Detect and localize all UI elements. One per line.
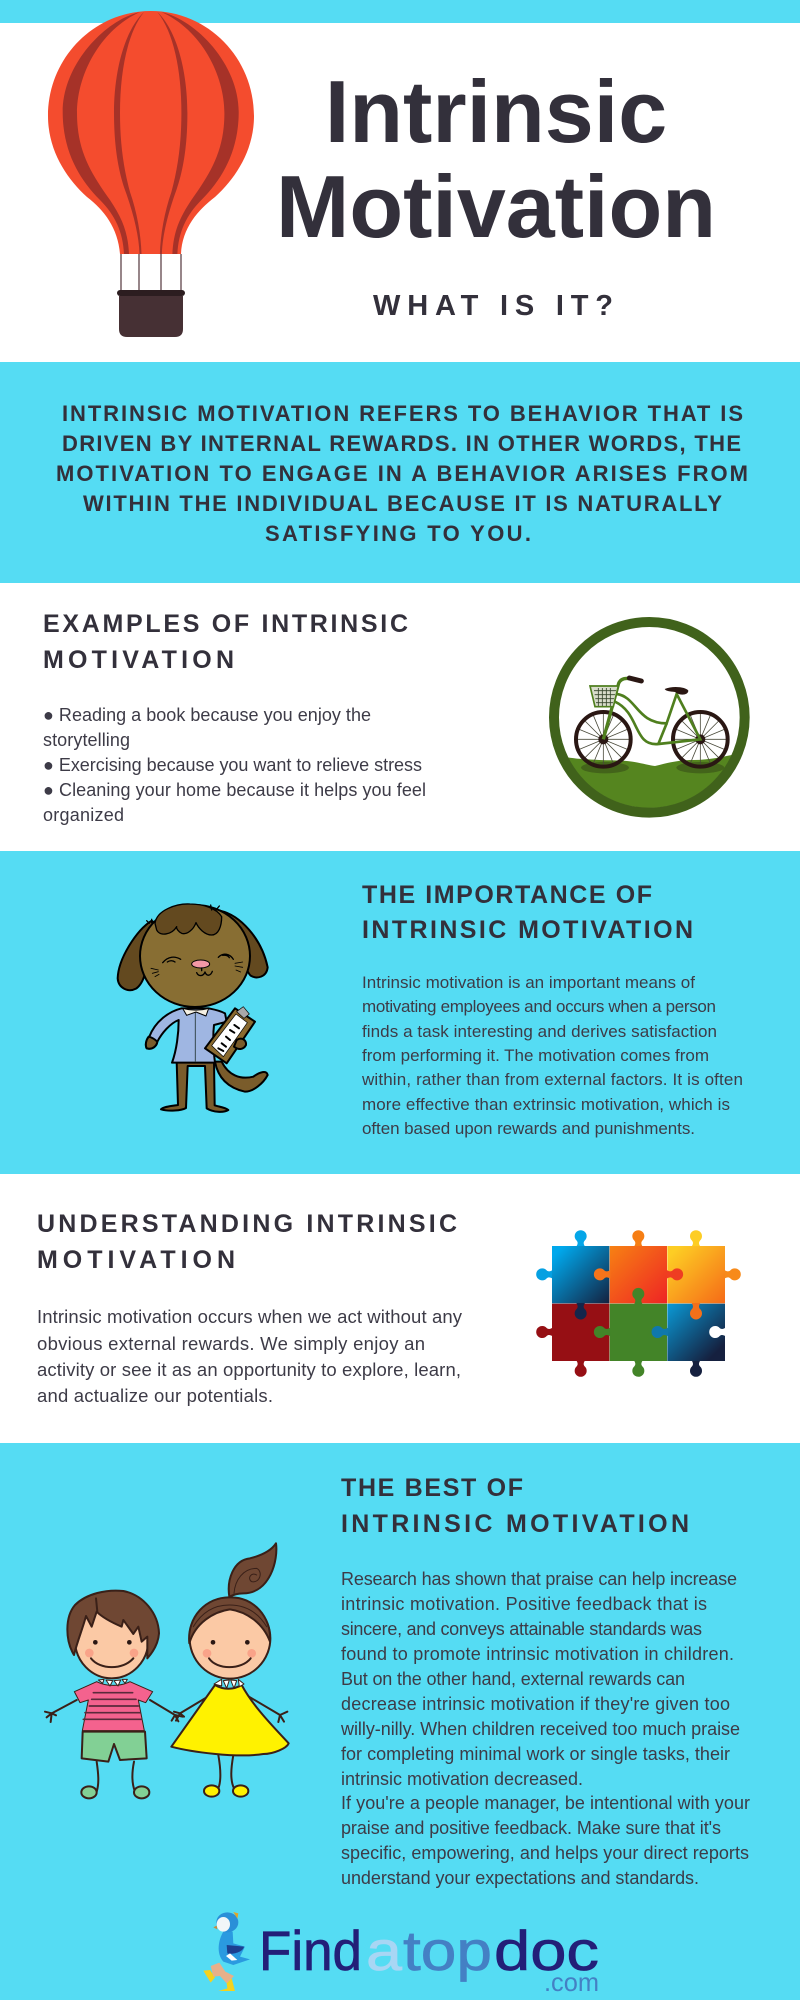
- heading: understanding: MOTIVATION: [37, 1246, 235, 1274]
- understanding paragraph: and actualize our potentials.: [37, 1385, 273, 1406]
- examples list: organized: [43, 805, 124, 825]
- panel: examples: [43, 610, 745, 825]
- understanding paragraph: [37, 1306, 463, 1406]
- heading: best of: [341, 1474, 689, 1538]
- heading: best of: INTRINSIC MOTIVATION: [341, 1510, 689, 1538]
- logo wordmark: .com: [544, 1967, 599, 1997]
- panel: understanding: [37, 1210, 741, 1406]
- best of paragraph: If you're a people manager, be intentional with your: [341, 1793, 750, 1813]
- heading: examples: MOTIVATION: [43, 646, 234, 674]
- best of paragraph: found to promote intrinsic motivation in children.: [341, 1644, 734, 1664]
- examples list: ● Reading a book because you enjoy the: [43, 705, 371, 725]
- importance paragraph: often based upon rewards and punishments.: [362, 1119, 695, 1138]
- logo: Findatopdoc.com: [203, 1912, 599, 1997]
- importance paragraph: [361, 973, 743, 1138]
- icon: puzzle: [536, 1230, 741, 1377]
- best of paragraph: understand your expectations and standards.: [341, 1868, 699, 1888]
- best of paragraph: Research has shown that praise can help increase: [341, 1569, 737, 1589]
- heading: examples: [43, 610, 408, 674]
- panel: the best of: [0, 1443, 800, 2000]
- heading: importance: INTRINSIC MOTIVATION: [362, 916, 693, 944]
- best of paragraph: sincere, and conveys attainable standards was: [341, 1619, 702, 1639]
- importance paragraph: within, rather than from external factors. It is often: [361, 1070, 743, 1089]
- importance paragraph: finds a task interesting and derives satisfaction: [362, 1022, 717, 1041]
- best of paragraph: willy-nilly. When children received too much praise: [340, 1719, 740, 1739]
- heading: understanding: [37, 1210, 457, 1274]
- panel: importance: [0, 851, 800, 1174]
- title: Intrinsic: [325, 62, 667, 161]
- heading: importance: THE IMPORTANCE OF: [362, 881, 652, 909]
- best of paragraph: for completing minimal work or single tasks, their: [341, 1744, 730, 1764]
- icon: dog with clipboard: [118, 904, 268, 1112]
- illustration: boy and girl holding hands: [45, 1543, 289, 1798]
- examples list: [43, 705, 426, 825]
- logo wordmark: doc: [494, 1919, 599, 1982]
- understanding paragraph: Intrinsic motivation occurs when we act without any: [37, 1306, 463, 1327]
- examples list: ● Exercising because you want to relieve stress: [43, 755, 422, 775]
- heading: best of: THE BEST OF: [341, 1474, 523, 1502]
- best of paragraph: intrinsic motivation. Positive feedback that is: [341, 1594, 707, 1614]
- best of paragraph: But on the other hand, external rewards can: [341, 1669, 685, 1689]
- panel: header: [48, 11, 716, 337]
- definition text: MOTIVATION TO ENGAGE IN A BEHAVIOR ARISES FROM: [56, 461, 748, 486]
- definition text: WITHIN THE INDIVIDUAL BECAUSE IT IS NATURALLY: [83, 491, 722, 516]
- examples list: ● Cleaning your home because it helps you feel: [43, 780, 426, 800]
- examples list: storytelling: [43, 730, 130, 750]
- icon: bicycle in circle: [554, 622, 745, 820]
- definition text: [56, 401, 748, 546]
- logo wordmark: top: [403, 1919, 492, 1982]
- understanding paragraph: obvious external rewards. We simply enjoy an: [37, 1333, 425, 1354]
- heading: examples: EXAMPLES OF INTRINSIC: [43, 610, 408, 638]
- importance paragraph: Intrinsic motivation is an important means of: [362, 973, 695, 992]
- icon: duck mascot: [203, 1912, 250, 1991]
- panel: definition: [0, 362, 800, 583]
- best of paragraph: praise and positive feedback. Make sure that it's: [341, 1818, 721, 1838]
- best of paragraph: specific, empowering, and helps your direct reports: [341, 1843, 749, 1863]
- best of paragraph: decrease intrinsic motivation if they're given too: [341, 1694, 730, 1714]
- heading: importance: [362, 881, 693, 944]
- icon: hot air balloon: [48, 11, 254, 337]
- logo wordmark: Find: [259, 1919, 362, 1982]
- boy: [45, 1591, 183, 1798]
- importance paragraph: motivating employees and occurs when a person: [362, 997, 716, 1016]
- logo wordmark: a: [366, 1919, 403, 1982]
- girl: [171, 1543, 289, 1797]
- importance paragraph: more effective than extrinsic motivation, which is: [362, 1095, 730, 1114]
- definition text: DRIVEN BY INTERNAL REWARDS. IN OTHER WORDS, THE: [62, 431, 741, 456]
- definition text: INTRINSIC MOTIVATION REFERS TO BEHAVIOR THAT IS: [62, 401, 743, 426]
- best of paragraph: [340, 1569, 750, 1888]
- subtitle: WHAT IS IT?: [373, 290, 613, 322]
- understanding paragraph: activity or see it as an opportunity to explore, learn,: [37, 1359, 461, 1380]
- logo wordmark: [259, 1919, 599, 1997]
- title: Motivation: [276, 157, 716, 256]
- title: [276, 62, 716, 256]
- definition text: SATISFYING TO YOU.: [265, 521, 531, 546]
- importance paragraph: from performing it. The motivation comes from: [362, 1046, 709, 1065]
- best of paragraph: intrinsic motivation decreased.: [341, 1769, 583, 1789]
- top banner strip: [0, 0, 800, 23]
- heading: understanding: UNDERSTANDING INTRINSIC: [37, 1210, 457, 1238]
